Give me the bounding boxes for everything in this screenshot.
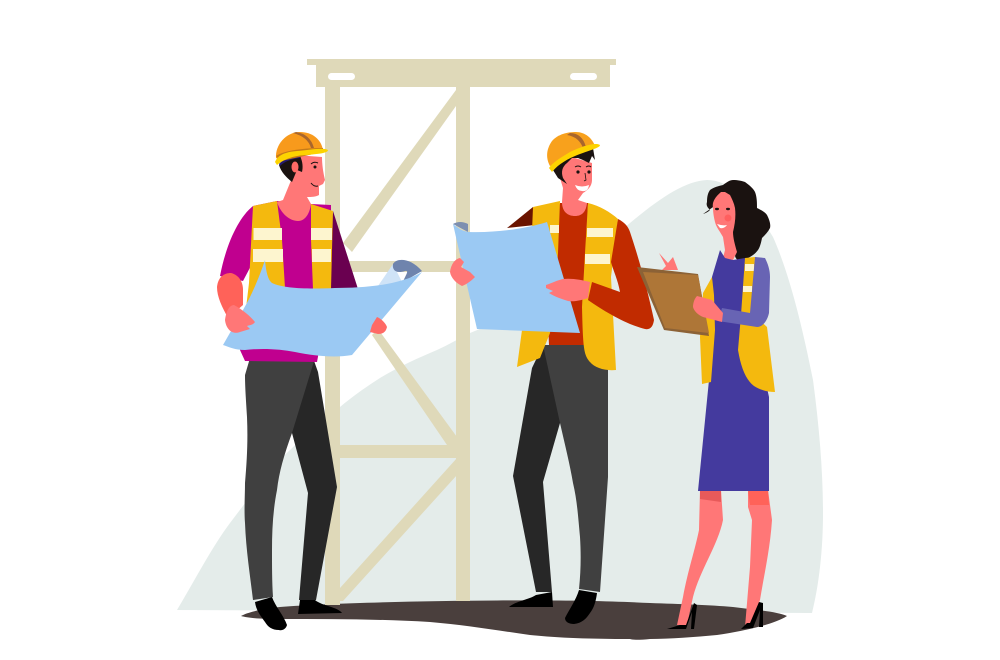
blueprint roll (378, 260, 422, 286)
left hand on sheet (225, 305, 255, 333)
heels (667, 602, 763, 629)
neck and head (277, 155, 325, 221)
worker left (217, 132, 422, 630)
arm (217, 273, 243, 318)
vest stripes (550, 225, 613, 264)
worker centre (450, 132, 654, 624)
blueprint sheet (223, 260, 422, 356)
clipboard (637, 267, 709, 336)
worker right (637, 180, 775, 629)
right hand (546, 279, 590, 301)
face details (715, 208, 732, 228)
hair back (703, 180, 770, 260)
dress (698, 250, 769, 491)
fingers (659, 253, 678, 270)
shoes (255, 597, 342, 630)
pants (513, 345, 608, 592)
shirt (220, 201, 358, 362)
vest stripes (743, 264, 754, 292)
vest (241, 201, 333, 350)
vest (517, 201, 618, 370)
legs (677, 490, 772, 627)
vest (700, 257, 775, 392)
neck and head (553, 148, 595, 216)
right hand (370, 317, 387, 334)
ground shadow (241, 600, 787, 640)
hard hat (547, 132, 600, 172)
hard hat (275, 132, 328, 165)
scaffold tower (307, 59, 616, 605)
hand (693, 296, 723, 322)
left hand (450, 258, 475, 286)
pants (245, 358, 337, 600)
shoes (509, 590, 597, 624)
shirt (507, 203, 588, 345)
sleeve (718, 257, 770, 327)
sleeve (588, 219, 654, 329)
neck and face (713, 192, 737, 260)
background blob (177, 180, 823, 613)
blueprint sheet (453, 222, 580, 333)
vest stripes (253, 228, 332, 262)
